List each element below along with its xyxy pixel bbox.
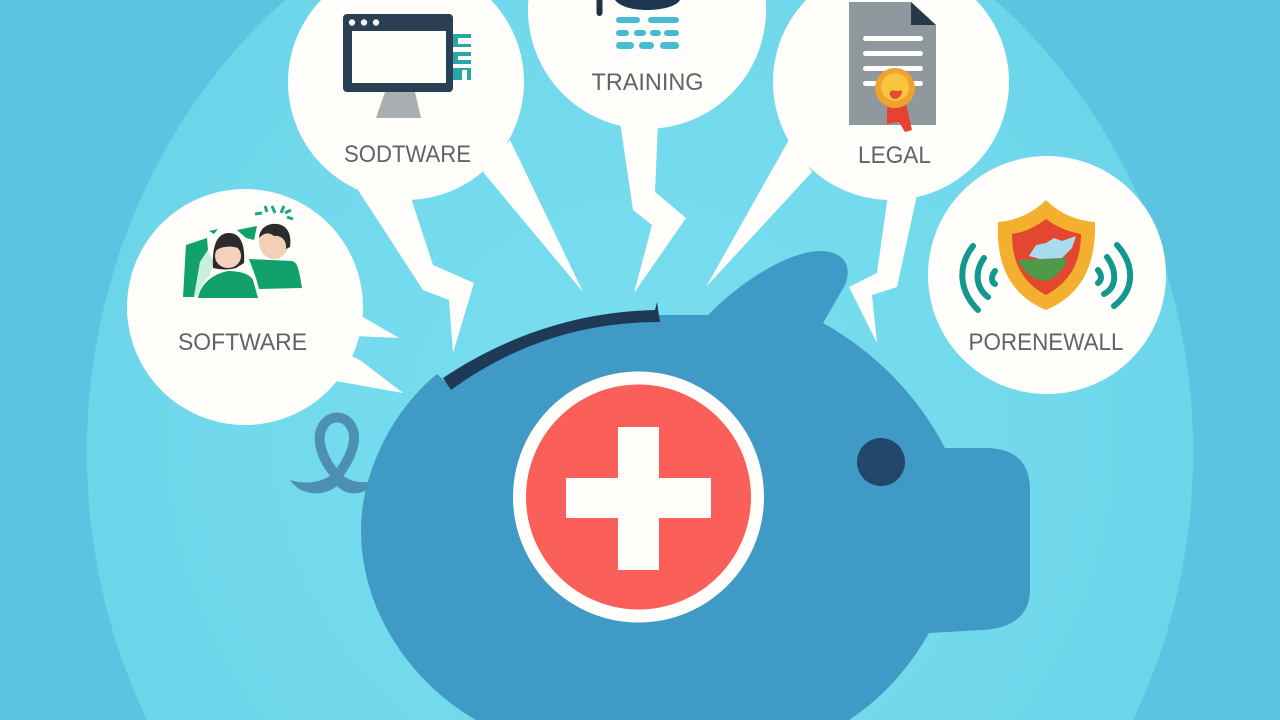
label: training: TRAINING <box>592 69 704 96</box>
speech bubble: software people <box>127 189 403 425</box>
speech bubble: training <box>528 0 766 293</box>
icon: graduation cap <box>596 0 680 49</box>
medical cross <box>566 427 711 570</box>
icon: legal document <box>849 2 936 132</box>
icon: monitor <box>343 14 471 118</box>
speech bubble: legal <box>706 0 1009 343</box>
icon: two people <box>183 206 302 299</box>
coin slot <box>443 302 660 390</box>
pig tail <box>290 418 377 493</box>
label: software misspelt: SODTWARE <box>344 141 471 168</box>
label: legal: LEGAL <box>858 142 931 169</box>
icon: shield with signal waves <box>962 200 1130 310</box>
speech bubble: firewall <box>928 156 1166 394</box>
speech bubble: software monitor <box>288 0 583 353</box>
label: firewall misspelt: PORENEWALL <box>968 329 1124 356</box>
pig eye <box>857 438 905 486</box>
pig body <box>361 251 1030 720</box>
medical badge <box>513 372 764 622</box>
piggy bank <box>290 251 1030 720</box>
label: software: SOFTWARE <box>178 329 307 356</box>
